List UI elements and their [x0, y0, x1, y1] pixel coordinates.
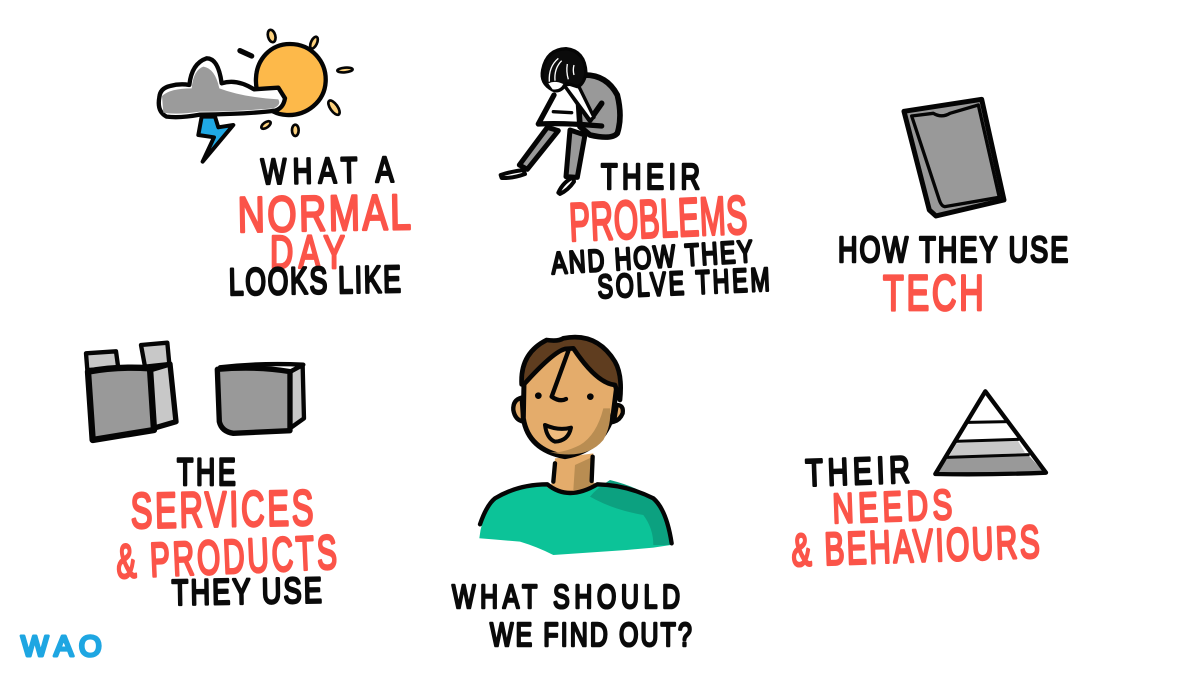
large box [217, 364, 304, 433]
ears [513, 398, 523, 422]
head and hair [542, 49, 586, 91]
text: what a normal day looks like: NORMAL [237, 185, 411, 243]
text: their needs and behaviours: THEIR [805, 450, 911, 495]
text: how they use tech: TECH [883, 266, 984, 322]
text: the services and products they use [115, 450, 338, 613]
text: what should we find out?: WHAT SHOULD [452, 580, 680, 616]
text: their problems and how they solve them [550, 156, 770, 306]
neck [547, 453, 597, 492]
legs [519, 127, 585, 177]
text: their problems and how they solve them: PROBLEMS [568, 186, 748, 253]
icon: lightning bolt [198, 117, 233, 162]
icon: sun, storm cloud and lightning [159, 29, 353, 162]
text: their needs and behaviours: & BEHAVIOURS [791, 517, 1041, 577]
text: how they use tech [838, 229, 1068, 322]
icon: cloud [159, 58, 285, 117]
text: what should we find out?: WE FIND OUT? [490, 618, 692, 654]
text: their problems and how they solve them: AND HOW THEY [550, 233, 754, 281]
text: what a normal day looks like [228, 149, 411, 303]
text: their needs and behaviours [791, 450, 1041, 577]
small box [86, 343, 176, 440]
text: their problems and how they solve them: SOLVE THEM [597, 262, 770, 306]
eyes [535, 392, 542, 399]
text: the services and products they use: SERVICES [130, 480, 314, 539]
text: how they use tech: HOW THEY USE [838, 229, 1068, 270]
arms [538, 95, 602, 126]
mouth [545, 425, 571, 442]
hair [522, 337, 621, 400]
text: what a normal day looks like: DAY [270, 227, 345, 278]
icon: boxes representing services and products [86, 343, 304, 440]
shirt [479, 484, 671, 555]
text: the services and products they use: & PRODUCTS [115, 526, 338, 589]
text: their needs and behaviours: NEEDS [832, 481, 953, 532]
text: their problems and how they solve them: THEIR [601, 156, 700, 197]
icon: sun [240, 29, 353, 136]
icon: person sitting with head in hands [501, 49, 620, 194]
text: what a normal day looks like: LOOKS LIKE [228, 257, 401, 303]
illustration: person with green shirt [479, 337, 672, 555]
icon: pyramid [935, 391, 1046, 474]
body [577, 75, 620, 137]
text: what a normal day looks like: WHAT A [260, 149, 395, 192]
logo: WAO: WAO [21, 631, 102, 663]
text: what should we find out? [452, 580, 692, 654]
text: the services and products they use: THEY USE [171, 570, 322, 613]
text: the services and products they use: THE [177, 450, 236, 493]
neck and shoulder outline [480, 457, 672, 543]
icon: tablet [904, 99, 1004, 216]
face [523, 347, 617, 457]
